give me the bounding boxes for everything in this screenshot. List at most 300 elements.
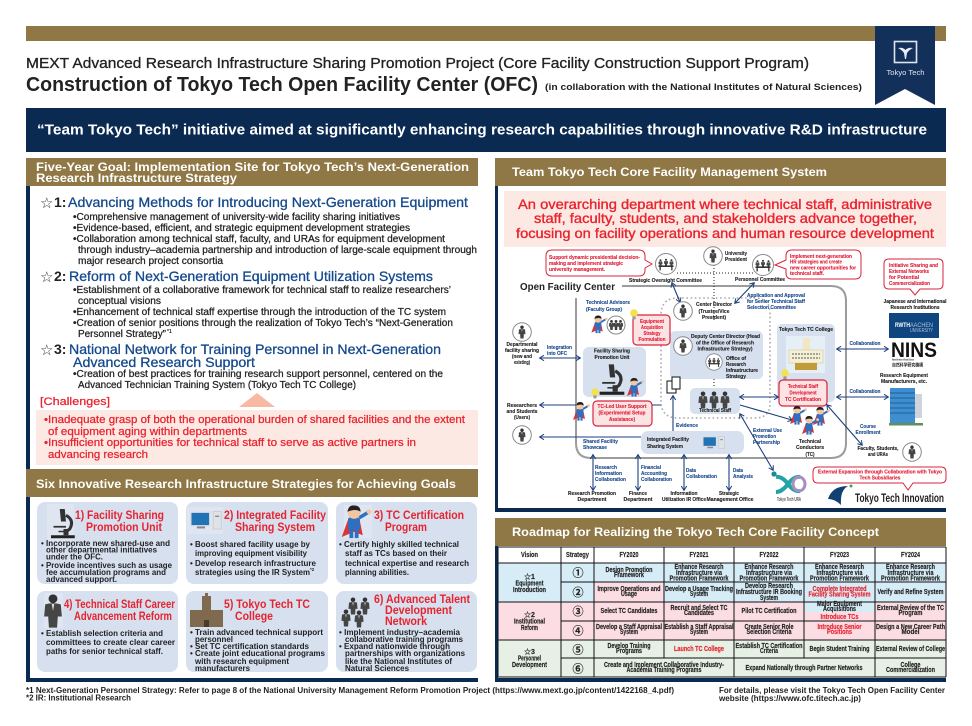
labels: collaboration types: Collaboration xyxy=(686,474,717,480)
logo: NINS: National Institutes of Natural Sciences xyxy=(892,358,914,362)
TC-led user support box xyxy=(593,401,652,426)
labels: collaboration xyxy=(850,341,881,395)
center director xyxy=(674,302,733,321)
collaboration arrows: departments xyxy=(593,455,729,490)
icon: personnel committee xyxy=(735,254,785,283)
labels: departments: Utilization IR Office xyxy=(662,497,706,503)
heading: six strategies xyxy=(26,469,478,497)
card 3: TC certification program: staff as TCs based on their xyxy=(345,549,447,558)
table row 5: Programs xyxy=(616,648,642,655)
deputy center director box: Infrastructure xyxy=(726,368,758,374)
deputy center director box: of the Office of Research xyxy=(696,340,755,346)
table row 1: Infrastructure via xyxy=(676,570,722,577)
icon: personnel committee: Personnel Committee xyxy=(735,277,785,283)
card 6: advanced talent development network: • Implement industry–academia xyxy=(339,628,461,637)
labels: collaboration types: Research xyxy=(595,465,617,471)
table row 4: Design a New Career Path xyxy=(876,624,945,631)
heading: roadmap: Roadmap for Realizing the Tokyo Tech Core Facility Concept xyxy=(512,525,879,539)
icon: computer xyxy=(187,507,223,534)
label: application and approval: Selection Committee xyxy=(747,305,796,311)
goal 2: Reform of Next-Generation Equipment Utilization Systems xyxy=(69,268,433,284)
card 5: Tokyo Tech TC College: manufacturers xyxy=(195,664,251,673)
card 4: technical staff career advancement reform: committees to create clear career xyxy=(46,638,175,647)
technical staff box xyxy=(690,388,740,414)
label: external use xyxy=(753,428,782,446)
table header row: FY2020 xyxy=(620,552,639,559)
table strategy numbers: ① xyxy=(572,566,584,580)
logo: RWTH Aachen: RWTH xyxy=(895,323,910,329)
goal 2: *1 xyxy=(167,329,172,335)
table header row: Strategy xyxy=(566,552,589,559)
goal 2: Personnel Strategy” xyxy=(78,329,166,340)
equipment acquisition strategy box xyxy=(633,315,670,345)
heading: roadmap xyxy=(495,518,946,546)
goal 1: ☆ xyxy=(40,194,53,212)
technical advisors label: Technical Advisors xyxy=(586,300,630,306)
goal 2: •Establishment of a collaborative framework for technical staff to realize researchers’ xyxy=(73,285,451,296)
table row 1: Infrastructure via xyxy=(888,570,934,577)
table row 6: College xyxy=(900,662,921,669)
bubble: personnel note: Implement next-generation xyxy=(790,254,852,260)
technical conductors: Technical xyxy=(799,439,821,445)
deputy center director box: Office of xyxy=(726,356,746,362)
technical staff development box: Development xyxy=(790,390,817,396)
table header row xyxy=(521,552,920,559)
departmental facility sharing: facility sharing xyxy=(505,348,539,354)
icon: documents xyxy=(667,377,680,393)
goal 2: conceptual visions xyxy=(78,296,161,307)
title note: (in collaboration with the National Institutes of Natural Sciences) xyxy=(545,82,862,93)
card 4: technical staff career advancement reform: paths for senior technical staff. xyxy=(46,647,163,656)
table row 6: Create and Implement Collaborative Industry- xyxy=(604,662,725,669)
table vision labels xyxy=(512,572,548,669)
website note xyxy=(718,686,945,703)
challenges box xyxy=(36,410,478,465)
bubble: strategic oversight note: Support dynamic presidential decision- xyxy=(549,255,640,261)
equipment acquisition strategy box: Acquisition xyxy=(641,325,663,331)
panel: five-year goal xyxy=(26,158,478,682)
deputy center director box: Research xyxy=(726,362,746,368)
logo: Tokyo Tech URA xyxy=(771,471,805,503)
technical conductors: (TC) xyxy=(806,452,815,458)
card 5: Tokyo Tech TC College: • Create joint educational programs xyxy=(190,649,326,658)
table row 3: Introduce TCs xyxy=(820,614,859,621)
bubble: personnel note: technical staff. xyxy=(790,271,824,277)
arrow: collaboration with manufacturers xyxy=(837,396,888,398)
table vision labels: Personnel xyxy=(518,656,541,662)
bubble: strategic oversight note: university management. xyxy=(549,267,605,273)
technical staff development box: Technical Staff xyxy=(788,384,818,390)
table row 6: Expand Nationally through Partner Networks xyxy=(746,665,863,672)
bubble: external networks note xyxy=(884,259,943,295)
labels: departments: Research Promotion xyxy=(568,491,617,497)
arrow: staff to URA xyxy=(740,414,773,470)
technical staff development box xyxy=(779,380,827,406)
label: external use: Promotion xyxy=(753,434,776,440)
icon: idea bulb xyxy=(630,309,638,319)
card 3: TC certification program: • Certify highly skilled technical xyxy=(339,540,459,549)
table row 4: Selection Criteria xyxy=(746,629,792,636)
card 3: TC certification program: technical expertise and research xyxy=(345,559,469,568)
Tokyo Tech ribbon logo: Tokyo Tech xyxy=(886,68,924,77)
table header row: FY2021 xyxy=(690,552,709,559)
technical advisors label: (Faculty Group) xyxy=(586,307,622,313)
card 5: Tokyo Tech TC College: • Set TC certification standards xyxy=(190,642,310,651)
table row 1: Infrastructure via xyxy=(746,570,792,577)
icon: idea bulb xyxy=(781,369,789,379)
goal 1: through industry–academia partnership and introduction of large-scale equipment through xyxy=(78,245,477,256)
goal 3: Advanced Research Support xyxy=(73,354,255,370)
table row 1: Framework xyxy=(614,572,644,579)
footnotes xyxy=(26,686,674,702)
card 2: integrated facility sharing system: • Develop research infrastructure xyxy=(190,559,317,568)
icon: group of people xyxy=(341,597,370,628)
table header row: FY2022 xyxy=(760,552,779,559)
label: shared facility showcase xyxy=(583,439,619,451)
departmental facility sharing: Departmental xyxy=(506,342,538,348)
system statement: staff, faculty, students, and stakeholders advance together, xyxy=(534,210,917,226)
goal 3: •Creation of best practices for training research support personnel, centered on the xyxy=(73,369,443,380)
table row 4 xyxy=(596,624,945,636)
card 1: facility sharing promotion unit: under the OFC. xyxy=(46,552,103,562)
TC-led user support box: Assistance) xyxy=(609,417,635,423)
table row 1: Promotion Framework xyxy=(740,576,799,582)
card 4: technical staff career advancement reform: Advancement Reform xyxy=(74,611,172,623)
project subtitle: MEXT Advanced Research Infrastructure Sharing Promotion Project (Core Facility Construction Support Program) xyxy=(26,56,809,72)
researchers and students: Researchers xyxy=(507,403,537,409)
icon: strategic oversight committee: Strategic Oversight Committee xyxy=(629,278,702,284)
table vision labels: ☆2 xyxy=(524,610,535,619)
website note: For details, please visit the Tokyo Tech Open Facility Center xyxy=(719,686,945,695)
card 3: TC certification program: 3) TC Certification xyxy=(374,510,464,522)
labels: collaboration types: Data xyxy=(733,468,744,474)
table row 2: System xyxy=(760,595,778,602)
table row 4: Model xyxy=(902,629,920,636)
table strategy numbers: ④ xyxy=(572,624,584,638)
bubble: personnel note: HR strategies and create xyxy=(790,260,842,266)
facility sharing promotion unit box xyxy=(583,347,646,398)
table row 6 xyxy=(604,662,935,674)
table vision labels: ☆3 xyxy=(524,647,535,656)
card 1: facility sharing promotion unit: Promotion Unit xyxy=(86,522,162,534)
table row 5 xyxy=(608,643,945,655)
arrow: showcase to users xyxy=(540,436,641,438)
table row 2: Usage xyxy=(621,591,637,598)
center inner dotted boundary xyxy=(661,298,770,418)
label: shared facility showcase: Showcase xyxy=(583,445,607,451)
card 5: Tokyo Tech TC College xyxy=(186,591,328,673)
table row 1: Promotion Framework xyxy=(881,576,940,582)
icon: university president: University xyxy=(725,251,748,257)
card 6: advanced talent development network: 6) Advanced Talent xyxy=(374,594,470,606)
goal 3: ☆ xyxy=(40,341,53,359)
card 3: TC certification program: planning abilities. xyxy=(345,568,409,577)
arrow: collaboration with research institutions xyxy=(837,348,888,350)
goal 1: •Comprehensive management of university-wide facility sharing initiatives xyxy=(73,212,400,223)
table row 3: Candidates xyxy=(684,610,714,617)
icon: office building xyxy=(889,388,923,426)
card 5: Tokyo Tech TC College: with research equipment xyxy=(194,657,289,666)
table row 1: Enhance Research xyxy=(674,564,724,571)
label: research institutions: Research Institutions xyxy=(890,305,940,311)
card 1: facility sharing promotion unit xyxy=(37,502,178,584)
arrow: course enrollment xyxy=(827,405,862,445)
icon: strategic oversight committee xyxy=(629,254,702,284)
card 5: Tokyo Tech TC College: personnel xyxy=(195,635,233,644)
challenges box: •Insufficient opportunities for technical staff to serve as active partners in xyxy=(44,437,416,449)
table row 3: Recruit and Select TC xyxy=(670,605,728,612)
bubble: external networks note: Initiative Sharing and xyxy=(889,263,938,269)
card 6: advanced talent development network: Development xyxy=(385,605,452,617)
card 1: facility sharing promotion unit: other departmental initiatives xyxy=(46,546,158,554)
center director: President) xyxy=(702,315,726,321)
icon: microscope xyxy=(47,504,75,541)
deputy center director box: Infrastructure Strategy) xyxy=(698,346,753,352)
table row 5: Criteria xyxy=(760,648,778,655)
bubble: strategic oversight note xyxy=(546,250,652,276)
goal 1: 1: xyxy=(54,194,66,210)
main title: Construction of Tokyo Tech Open Facility Center (OFC) xyxy=(26,74,538,96)
card 2: integrated facility sharing system: 2) Integrated Facility xyxy=(224,510,327,522)
labels: collaboration: Collaboration xyxy=(850,389,881,395)
card 2: integrated facility sharing system: strategies using the IR System xyxy=(195,568,310,577)
equipment acquisition strategy box: Strategy xyxy=(644,331,661,337)
card 5: Tokyo Tech TC College: College xyxy=(235,611,273,623)
arrow: personnel to center director xyxy=(735,283,754,303)
card 6: advanced talent development network: partnerships with organizations xyxy=(345,649,466,658)
labels: collaboration: Collaboration xyxy=(850,341,881,347)
researchers and students xyxy=(506,403,538,444)
challenges box: •Inadequate grasp of both the operational burden of shared facilities and the extent xyxy=(44,414,465,426)
label: integration into OFC: into OFC xyxy=(547,351,567,357)
card 5: Tokyo Tech TC College: 5) Tokyo Tech TC xyxy=(224,599,310,611)
labels: collaboration types: Financial xyxy=(641,465,661,471)
banner: “Team Tokyo Tech” initiative aimed at significantly enhancing research capabilities through innovative R&D infrastructure xyxy=(37,122,927,138)
table strategy numbers: ⑥ xyxy=(572,662,584,676)
table row 2: Infrastructure IR Booking xyxy=(736,589,802,596)
Tokyo Tech ribbon logo xyxy=(875,26,935,105)
logo: NINS: NINS xyxy=(891,339,937,362)
table vision labels: Introduction xyxy=(513,587,546,594)
goal heading: Research Infrastructure Strategy xyxy=(36,171,237,185)
goal 2 xyxy=(40,268,453,340)
table row 4: Create Senior Role xyxy=(744,624,794,631)
arrow: challenges to goals xyxy=(239,393,275,407)
goal 3: Advanced Technician Training System (Tokyo Tech TC College) xyxy=(78,380,356,391)
icon: college building colour xyxy=(789,338,823,370)
arrow: oversight to center director xyxy=(672,283,680,302)
open facility center label: Open Facility Center xyxy=(520,281,615,293)
goal 1: Advancing Methods for Introducing Next-Generation Equipment xyxy=(68,194,468,210)
logo: NINS: 自然科学研究機構 xyxy=(892,362,923,368)
table row 1: Promotion Framework xyxy=(670,576,729,582)
integrated facility sharing system box xyxy=(641,431,744,454)
label: research equipment manufacturers: Research Equipment xyxy=(880,373,928,379)
banner xyxy=(26,108,946,152)
arrow: staff to TC certification xyxy=(740,396,778,398)
card 5: Tokyo Tech TC College: • Train advanced technical support xyxy=(190,628,323,637)
labels: collaboration types: Collaboration xyxy=(595,477,626,483)
TC-led user support box: (Experimental Setup xyxy=(598,410,646,416)
system heading xyxy=(495,158,946,186)
goal 2: ☆ xyxy=(40,268,53,286)
table row 4: Establish a Staff Appraisal xyxy=(664,624,734,631)
label: application and approval xyxy=(747,293,805,311)
card 3: TC certification program xyxy=(336,502,477,584)
icon: advisors xyxy=(591,315,625,334)
faculty, students and URAs xyxy=(858,443,921,461)
card 1: facility sharing promotion unit: • Incorporate new shared-use and xyxy=(41,539,170,548)
label: research equipment manufacturers: Manufacturers, etc. xyxy=(881,379,927,385)
table header row: Vision xyxy=(521,552,538,559)
table row 1 xyxy=(606,564,940,582)
table row 4: Introduce Senior xyxy=(818,624,862,631)
card 1: facility sharing promotion unit: fee accumulation programs and xyxy=(46,568,166,577)
logo: RWTH Aachen: UNIVERSITY xyxy=(910,328,934,334)
system heading: Team Tokyo Tech Core Facility Management System xyxy=(512,165,827,179)
arrow: user support to users xyxy=(540,404,576,406)
icon: university president xyxy=(704,247,748,265)
table row 3 xyxy=(600,601,944,621)
label: application and approval: Application and Approval xyxy=(747,293,805,299)
label: research equipment manufacturers xyxy=(880,373,928,385)
faculty, students and URAs: and URAs xyxy=(868,452,888,458)
center director: Center Director xyxy=(696,302,733,308)
card 4: technical staff career advancement reform xyxy=(37,591,178,672)
labels: collaboration types: Data xyxy=(686,468,697,474)
table row 4: System xyxy=(620,629,638,636)
labels: collaboration types: Collaboration xyxy=(641,477,672,483)
label: research institutions: Japanese and International xyxy=(884,299,947,305)
labels: collaboration types: Information xyxy=(595,471,623,477)
researchers and students: (Users) xyxy=(514,415,530,421)
table row 2: Improve Operations and xyxy=(598,586,660,593)
departmental facility sharing: (new and xyxy=(512,354,532,360)
card 6: advanced talent development network: Natural Sciences xyxy=(345,664,410,673)
goal heading xyxy=(26,158,478,186)
table row 5: Establish TC Certification xyxy=(736,643,802,650)
system statement: focusing on facility operations and human resource development xyxy=(516,225,934,241)
table row 4: Develop a Staff Appraisal xyxy=(596,624,662,631)
faculty, students and URAs: Faculty, Students, xyxy=(858,446,899,452)
challenges box: of equipment aging within departments xyxy=(48,426,248,438)
labels: departments: Information xyxy=(670,491,698,497)
label: external use: External Use xyxy=(753,428,782,434)
labels: departments: Management Office xyxy=(706,497,754,503)
arrow: integration into OFC xyxy=(540,357,580,359)
facility sharing promotion unit box: Promotion Unit xyxy=(594,355,630,361)
card 3: TC certification program: Program xyxy=(385,522,427,534)
labels: collaboration types: Accounting xyxy=(641,471,667,477)
table row 3: Pilot TC Certification xyxy=(742,608,796,615)
bubble: strategic oversight note: making and implement strategic xyxy=(549,261,623,267)
system statement xyxy=(504,191,946,247)
footnotes: *2 IR: Institutional Research xyxy=(26,694,131,702)
label: integration into OFC xyxy=(547,345,572,357)
table row 2: Complete Integrated xyxy=(812,586,866,593)
labels: departments: Finance xyxy=(629,491,647,497)
goal heading: Five-Year Goal: Implementation Site for Tokyo Tech’s Next-Generation xyxy=(36,160,469,174)
table row 4: Positions xyxy=(827,629,852,636)
label: course enrollment: Course xyxy=(860,424,876,430)
goal 1: •Collaboration among technical staff, faculty, and URAs for equipment development xyxy=(73,234,445,245)
table row 2: Develop a Usage Tracking xyxy=(665,586,733,593)
challenges label: [Challenges] xyxy=(40,396,110,408)
facility sharing promotion unit box: Facility Sharing xyxy=(594,348,631,354)
table row 3: Acquisitions xyxy=(823,606,856,613)
table vision labels: Reform xyxy=(521,625,538,632)
labels: departments: Department xyxy=(578,497,607,503)
goal 1 xyxy=(40,194,477,267)
label: research institutions xyxy=(884,299,947,311)
bubble: external expansion: External Expansion through Collaboration with Tokyo xyxy=(818,470,943,476)
table row 5: Begin Student Training xyxy=(810,646,870,653)
logo: RWTH Aachen xyxy=(889,313,939,338)
goal 2: 2: xyxy=(54,268,66,284)
equipment acquisition strategy box: Formulation xyxy=(638,337,666,343)
bubble: external expansion xyxy=(813,467,946,490)
card 6: advanced talent development network: like the National Institutes of xyxy=(345,657,452,666)
challenges box: advancing research xyxy=(48,449,148,461)
label: external use: Partnership xyxy=(753,440,780,446)
card 6: advanced talent development network: Network xyxy=(385,616,428,628)
technical conductors: Conductors xyxy=(796,445,824,451)
table row 1: Enhance Research xyxy=(886,564,935,571)
deputy center director box xyxy=(670,331,763,380)
table row 5: External Review of College xyxy=(876,646,945,653)
goal 1: major research project consortia xyxy=(78,256,223,267)
card 2: integrated facility sharing system xyxy=(186,502,328,584)
footnotes: *1 Next-Generation Personnel Strategy: Refer to page 8 of the National University Management Reform Promotion Project (https://www.mext.go.jp/content/1422168_4.pdf) xyxy=(26,686,674,695)
equipment acquisition strategy box: Equipment xyxy=(640,319,664,325)
technical conductors xyxy=(790,406,830,458)
card 4: technical staff career advancement reform: • Establish selection criteria and xyxy=(41,629,163,638)
table row 1: Enhance Research xyxy=(815,564,864,571)
goal 3: National Network for Training Personnel in Next-Generation xyxy=(69,341,441,357)
departmental facility sharing xyxy=(505,323,539,366)
diagram: organization xyxy=(505,247,947,505)
connector: user support line xyxy=(652,404,661,406)
table vision labels: Development xyxy=(512,662,548,669)
table row 1: Promotion Framework xyxy=(810,576,869,582)
arrow: staff to conductors xyxy=(740,405,792,420)
table row 2: System xyxy=(690,591,708,598)
table row 2 xyxy=(598,583,944,602)
goal 2: •Enhancement of technical staff expertise through the introduction of the TC system xyxy=(73,307,446,318)
goal 2: •Creation of senior positions through the realization of Tokyo Tech’s “Next-Generation xyxy=(73,318,453,329)
arrow: evidence xyxy=(672,396,674,431)
icon: university president: President xyxy=(725,257,747,263)
bubble: external networks note: Commercialization xyxy=(889,281,930,287)
goal 1: •Evidence-based, efficient, and strategic equipment development strategies xyxy=(73,223,410,234)
deputy center director box: Strategy xyxy=(726,374,747,380)
bubble: external expansion: Tech Subsidiaries xyxy=(860,476,900,482)
card 2: integrated facility sharing system: improving equipment visibility xyxy=(195,549,308,558)
table row 3: Program xyxy=(898,610,922,617)
label: application and approval: for Senior Technical Staff xyxy=(747,299,805,305)
bubble: personnel note: new career opportunities for xyxy=(790,266,857,272)
table row 5: Launch TC College xyxy=(674,646,724,653)
roadmap table xyxy=(495,546,946,682)
table vision labels: Equipment xyxy=(516,580,544,588)
integrated facility sharing system box: Sharing System xyxy=(647,444,683,450)
table strategy numbers: ② xyxy=(572,586,584,599)
icon: TC at user support xyxy=(573,402,590,421)
TC-led user support box: TC-Led User Support xyxy=(598,404,647,410)
card 1: facility sharing promotion unit: advanced support. xyxy=(46,575,117,584)
goal 3 xyxy=(40,341,443,391)
card 2: integrated facility sharing system: • Boost shared facility usage by xyxy=(190,540,311,549)
